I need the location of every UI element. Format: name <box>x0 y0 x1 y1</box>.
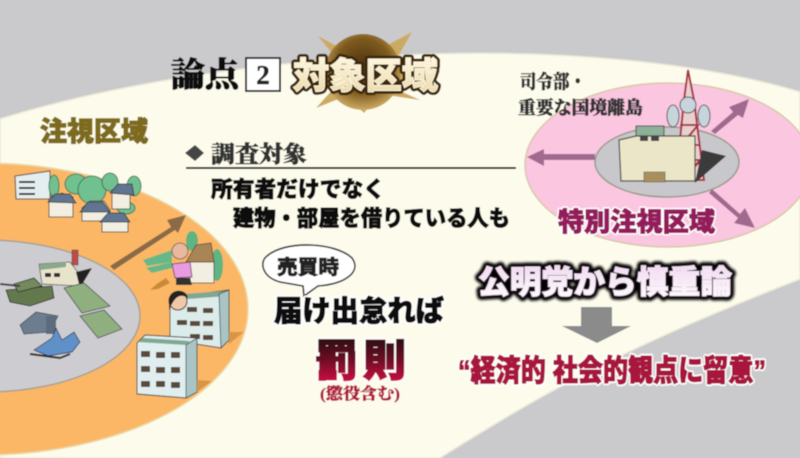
text: headquarters and border islands: 重要な国境離島 <box>518 97 643 118</box>
text: penalty: 罰則 <box>315 338 406 386</box>
icon: radio tower <box>667 70 726 183</box>
text: Komeito caution: 公明党から慎重論 <box>478 264 732 300</box>
icon: apartment building with resident <box>169 290 244 348</box>
text: including imprisonment: (懲役含む) <box>320 384 400 403</box>
icon: military base <box>39 250 122 338</box>
title: target area: 対象区域 <box>293 55 438 96</box>
title burst <box>300 32 440 113</box>
section heading: survey target: 調査対象 <box>211 142 307 167</box>
text: penalty: 罰則 <box>315 338 406 386</box>
text: headquarters and border islands: 司令部・ <box>520 70 586 93</box>
text: survey target description <box>211 177 510 231</box>
title: target area: 対象区域 <box>293 55 438 96</box>
text: Komeito caution: 公明党から慎重論 <box>478 264 732 300</box>
icon: headquarters building <box>619 126 695 182</box>
heading: watch zone: 注視区域 <box>40 117 148 147</box>
arrow: upper right <box>711 99 749 134</box>
arrow: outward expansion <box>110 215 186 270</box>
title: issue 2 <box>171 57 280 94</box>
arrow: left <box>527 149 595 166</box>
text: survey target description: 所有者だけでなく <box>211 177 385 202</box>
callout: at time of sale <box>263 245 355 296</box>
arrow: down <box>562 307 631 343</box>
title: issue 2: 論点 <box>171 57 242 94</box>
icon: houses <box>48 184 134 232</box>
icon: farmer and cottage <box>143 231 223 290</box>
icon: soldiers and jets <box>20 312 80 358</box>
grey inner zone <box>595 127 739 197</box>
icon: trees <box>49 173 141 214</box>
orange outer zone <box>0 163 248 455</box>
heading: special watch zone: 特別注視区域 <box>558 207 715 237</box>
section heading: survey target <box>185 142 516 169</box>
text: Komeito caution: 公明党から慎重論 <box>478 264 732 300</box>
callout: at time of sale: 売買時 <box>277 255 339 279</box>
text: failure to notify: 届け出怠れば <box>274 295 444 328</box>
text: headquarters and border islands <box>518 70 643 118</box>
panel: watch zone (orange) <box>0 163 248 455</box>
icon: apartment building front <box>137 335 212 398</box>
grey inner zone <box>0 240 140 392</box>
pink outer zone <box>525 83 800 247</box>
icon: tank <box>0 278 54 306</box>
panel: special watch zone (pink) <box>525 70 800 247</box>
text: failure to notify: 届け出怠れば <box>274 295 444 328</box>
icon: office block <box>15 171 50 199</box>
title: issue 2: 2 <box>256 60 270 90</box>
text: survey target description: 建物・部屋を借りている人も <box>233 206 510 231</box>
arrow: lower right <box>709 189 755 228</box>
heading: special watch zone: 特別注視区域 <box>558 207 715 237</box>
